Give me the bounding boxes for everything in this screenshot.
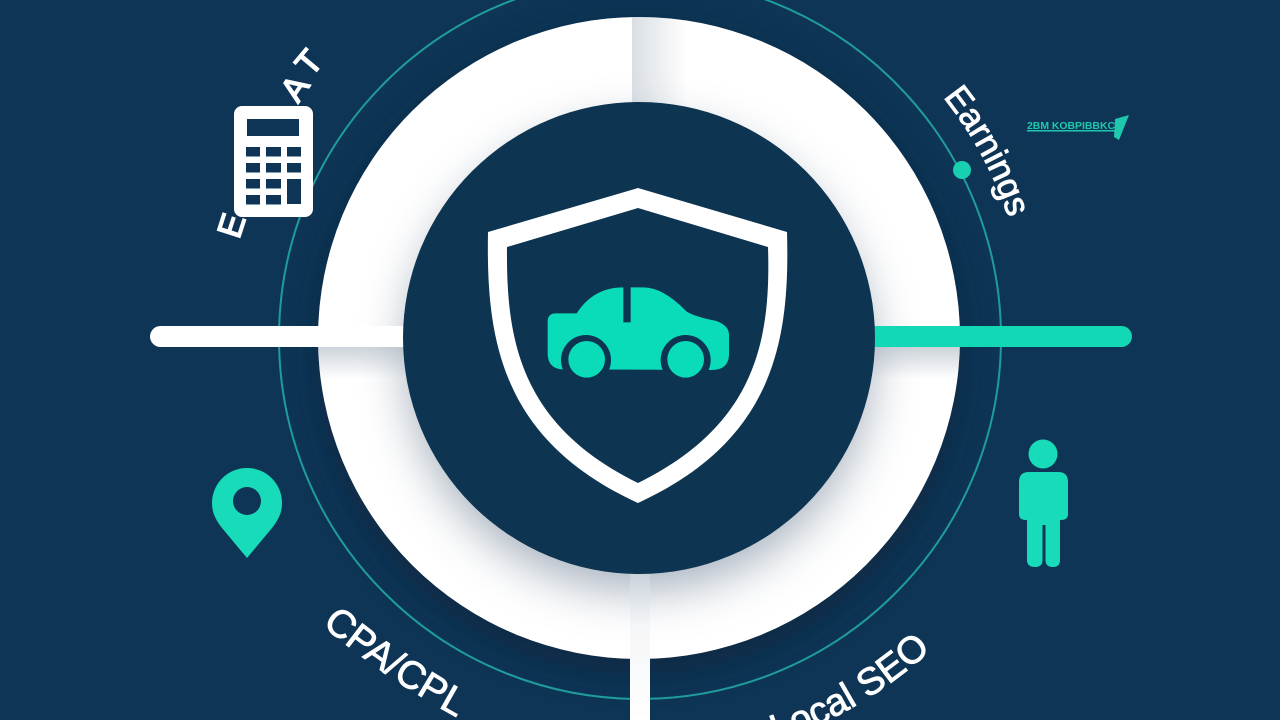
icon: person — [1019, 440, 1068, 567]
right teal bar — [860, 326, 1132, 347]
inner circle soft shadow — [407, 126, 871, 590]
top seam shadow — [632, 17, 676, 104]
shade below left bar — [318, 347, 405, 374]
bottom vertical bar — [630, 574, 650, 720]
small teal caption with arrow: 2BM KOBPIBBKC — [1027, 121, 1115, 132]
label: E-E-A-T fragments: E — [210, 209, 254, 242]
label: Earnings: Earnings — [944, 84, 1025, 216]
icon: car — [548, 287, 729, 385]
shade below right bar — [873, 347, 960, 374]
white ring panel — [310, 10, 965, 659]
label: E-E-A-T fragments: T — [288, 43, 330, 83]
centre dark circle — [403, 102, 875, 574]
thin teal orbit ring — [279, 0, 1001, 699]
icon: location pin — [212, 468, 282, 558]
label: E-E-A-T fragments: A — [273, 68, 317, 108]
small teal caption with arrow — [1027, 115, 1129, 140]
outer ring shadow — [315, 26, 963, 674]
icon: shield — [488, 188, 787, 503]
label: E-E-A-T fragments — [210, 43, 330, 242]
left white bar — [150, 326, 420, 347]
teal dot on orbit — [953, 161, 971, 179]
icon: calculator — [234, 106, 313, 217]
